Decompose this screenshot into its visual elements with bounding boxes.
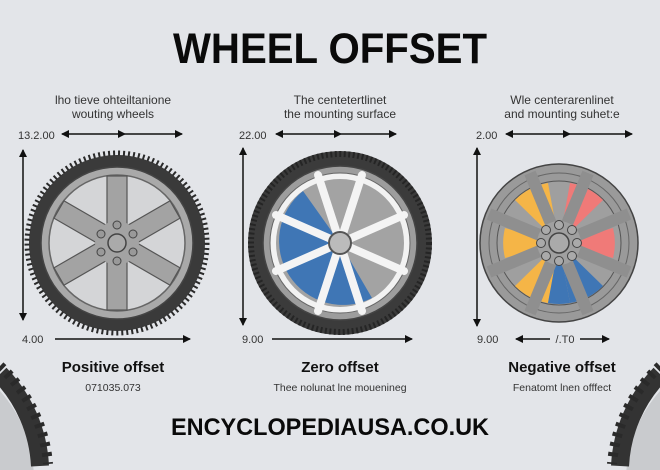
vertical arrow xyxy=(242,148,244,325)
label: Positive offset xyxy=(62,359,164,376)
wheel: colored spokes xyxy=(480,164,638,322)
label: Negative offset xyxy=(508,359,616,376)
dimension top: 13.2.00 xyxy=(18,130,55,142)
panel: negative offset xyxy=(476,93,638,394)
corner tire: bottom right xyxy=(612,366,660,470)
corner tire: bottom left xyxy=(0,366,48,470)
wheel: six spoke xyxy=(27,153,207,333)
caption text: Wle centerarenlinet xyxy=(510,93,614,107)
caption text: The centetertlinet xyxy=(294,93,387,107)
dimension bottom: 9.00 xyxy=(242,334,263,346)
sub label: Fenatomt lnen offfect xyxy=(513,382,611,394)
dimension bottom: /.T0 xyxy=(556,334,574,346)
panel: positive offset xyxy=(18,93,207,394)
panel: zero offset xyxy=(239,93,432,394)
sub label: 071035.073 xyxy=(85,382,141,394)
caption text: wouting wheels xyxy=(71,107,154,121)
dimension bottom xyxy=(477,334,609,346)
dimension bottom: 4.00 xyxy=(22,334,43,346)
vertical arrow xyxy=(22,150,24,320)
dimension top xyxy=(18,130,182,142)
caption text: lho tieve ohteiltanione xyxy=(55,93,171,107)
dimension top: 22.00 xyxy=(239,130,267,142)
caption text: and mounting suhet:e xyxy=(504,107,620,121)
dimension top xyxy=(239,130,396,142)
label: Zero offset xyxy=(301,359,379,376)
caption text: the mounting surface xyxy=(284,107,396,121)
vertical arrow xyxy=(476,148,478,326)
title: WHEEL OFFSET xyxy=(173,25,487,73)
dimension top xyxy=(476,130,632,142)
sub label: Thee nolunat lne mouenineg xyxy=(273,382,407,394)
dimension bottom: 9.00 xyxy=(477,334,498,346)
footer website: ENCYCLOPEDIAUSA.CO.UK xyxy=(171,414,490,441)
wheel: multi spoke blue xyxy=(248,151,432,335)
dimension top: 2.00 xyxy=(476,130,497,142)
